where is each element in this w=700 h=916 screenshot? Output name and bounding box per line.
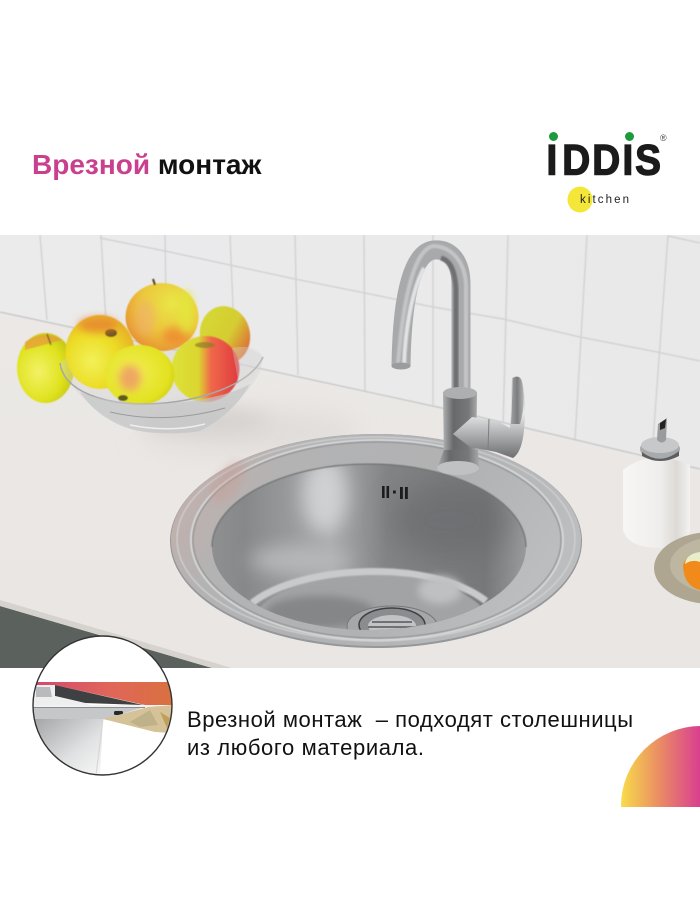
- inset detail circle: [30, 634, 175, 779]
- counter shadow patches: [193, 418, 329, 446]
- apple: right: [172, 336, 240, 402]
- apple: middle left: [66, 315, 134, 389]
- faucet: [392, 246, 525, 475]
- logo green dots: [549, 132, 634, 141]
- glass bowl front: [60, 357, 263, 404]
- title: Врезной монтаж: [32, 149, 262, 180]
- inset sink rim: [33, 705, 160, 719]
- inset circle outline: [33, 636, 172, 775]
- dispenser collar: [640, 446, 680, 459]
- bowl floor: [260, 575, 480, 622]
- inset chipboard edge: [103, 705, 172, 733]
- sink outer rim: [170, 434, 582, 648]
- sink bowl: [212, 464, 526, 630]
- logo wordmark: IDDIS: [546, 136, 661, 184]
- caption line 2: из любого материала.: [187, 735, 424, 760]
- kitchen photo illustration: [0, 235, 700, 682]
- bowl shadow: [206, 408, 256, 430]
- sink: [170, 434, 582, 648]
- apple: top: [126, 279, 198, 351]
- countertop: [0, 392, 700, 668]
- logo kitchen label: kitchen: [580, 194, 631, 206]
- tiled wall: [0, 235, 700, 475]
- logo registered mark: ®: [660, 133, 667, 143]
- soap dispenser: [623, 418, 690, 548]
- overflow slots: [382, 486, 408, 499]
- plate with apple slice: [654, 532, 700, 604]
- faucet base: [438, 450, 479, 467]
- logo: IDDIS kitchen: [546, 132, 667, 212]
- faucet handle: [453, 377, 525, 458]
- faucet body: [443, 392, 477, 450]
- caption line 1: Врезной монтаж – подходят столешницы: [187, 707, 633, 732]
- apple: left: [17, 333, 74, 403]
- inset steel bowl: [33, 719, 103, 775]
- decorative gradient circle: [621, 726, 700, 886]
- apple: back right: [199, 305, 251, 361]
- inset countertop strip: [33, 682, 172, 705]
- drain: [346, 606, 436, 630]
- dispenser pump: [657, 418, 667, 442]
- glass bowl back: [60, 358, 262, 392]
- cabinet below countertop: [0, 606, 212, 668]
- rim warm reflection: [210, 460, 246, 500]
- fruit bowl with apples: [17, 279, 270, 433]
- inset background: [44, 636, 160, 668]
- inset rim clip: [114, 711, 123, 715]
- logo yellow blob: [568, 186, 592, 212]
- plate: [654, 532, 700, 604]
- apple: front: [104, 345, 174, 405]
- faucet spout: [401, 250, 461, 400]
- dispenser bottle: [623, 458, 690, 548]
- caption text: [187, 707, 633, 760]
- apple slice: [683, 558, 700, 590]
